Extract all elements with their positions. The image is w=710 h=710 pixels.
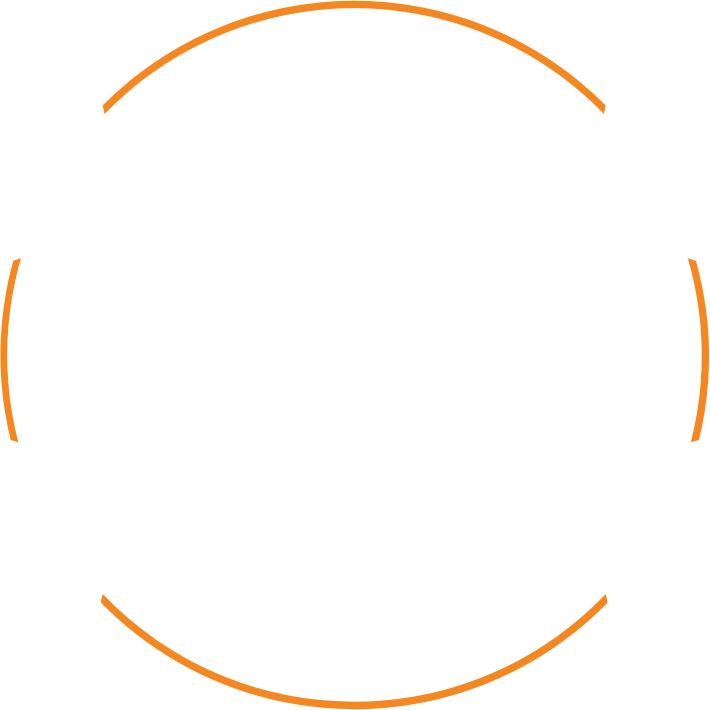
arc: right [688,258,709,442]
arc: bottom [101,594,608,709]
arc: left [0,258,21,442]
arc: top [103,1,606,114]
